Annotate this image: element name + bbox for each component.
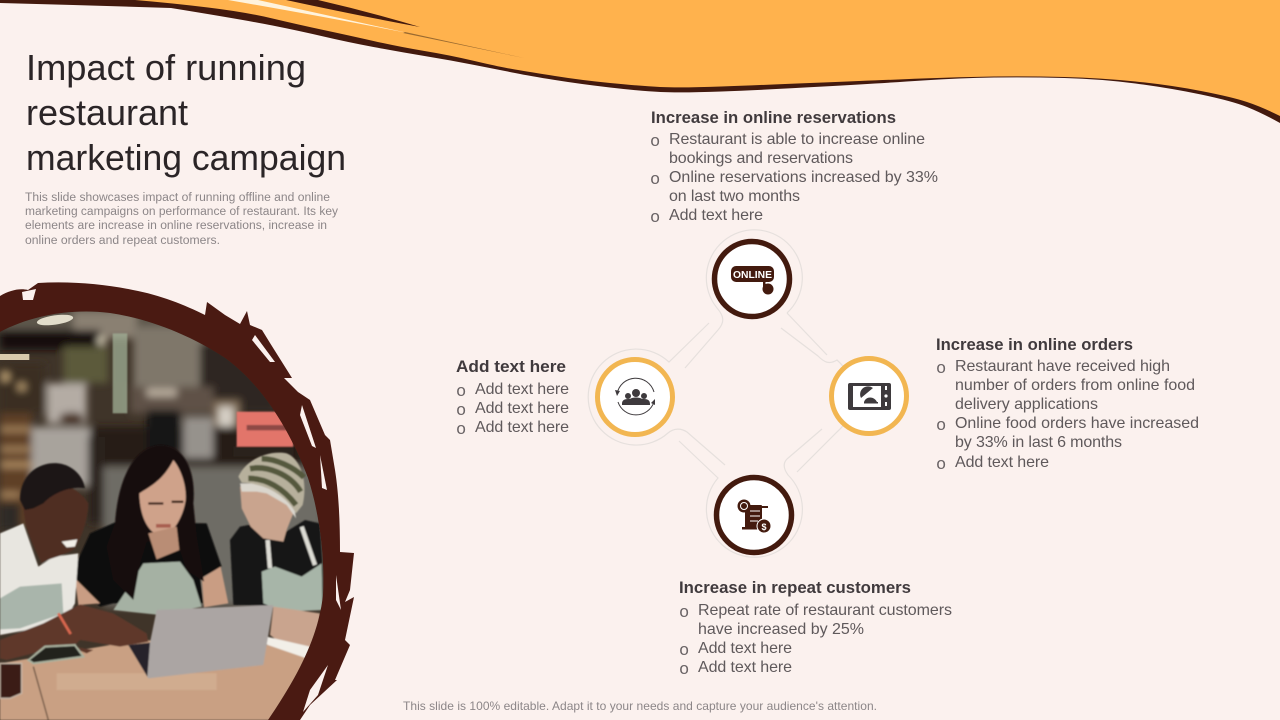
icon: tablet with food xyxy=(848,383,891,410)
text block: online orders: o xyxy=(936,360,946,379)
text block: online orders: Add text here xyxy=(955,454,1049,471)
brush ring flecks xyxy=(22,289,341,712)
photo: restaurant staff around a laptop xyxy=(0,312,324,720)
text block: online reservations: Increase in online reservations xyxy=(651,108,896,127)
text block: online reservations: o xyxy=(650,133,660,152)
node: online orders xyxy=(832,358,906,434)
brush ring xyxy=(0,282,354,720)
text block: repeat customers: o xyxy=(679,604,689,623)
description text: This slide showcases impact of running offline and online xyxy=(25,192,330,204)
node: add text here xyxy=(598,360,672,434)
text block: online orders: o xyxy=(936,417,946,436)
description text: marketing campaigns on performance of restaurant. Its key xyxy=(25,206,338,218)
text block: repeat customers: Increase in repeat customers xyxy=(679,578,911,597)
left woman xyxy=(0,523,78,635)
title: Impact of running xyxy=(26,47,306,88)
description text: elements are increase in online reservations, increase in xyxy=(25,220,327,232)
center woman xyxy=(72,522,222,607)
title xyxy=(26,47,346,178)
right woman xyxy=(230,520,323,607)
description text xyxy=(25,192,338,247)
text block: add text here: o xyxy=(456,383,466,402)
node: online reservations xyxy=(714,242,790,316)
text block: add text here: Add text here xyxy=(475,419,569,436)
text block: repeat customers: Add text here xyxy=(698,640,792,657)
text block: online reservations: bookings and reservations xyxy=(669,150,853,167)
node: repeat customers xyxy=(716,478,792,552)
text block: add text here: o xyxy=(456,402,466,421)
text block: online reservations: Add text here xyxy=(669,207,763,224)
text block: add text here: Add text here xyxy=(475,381,569,398)
text block: add text here xyxy=(456,357,569,440)
text block: online orders: Increase in online orders xyxy=(936,335,1133,354)
text block: repeat customers: Repeat rate of restaurant customers xyxy=(698,602,952,619)
text block: add text here: Add text here xyxy=(456,357,566,376)
footer note: This slide is 100% editable. Adapt it to your needs and capture your audience's attention. xyxy=(403,699,877,713)
text block: online orders: Restaurant have received high xyxy=(955,358,1170,375)
top orange wave banner xyxy=(0,0,1280,123)
text block: add text here: Add text here xyxy=(475,400,569,417)
text block: repeat customers: o xyxy=(679,661,689,680)
title: restaurant xyxy=(26,92,188,133)
text block: online orders: o xyxy=(936,456,946,475)
text block: online reservations: o xyxy=(650,209,660,228)
laptop xyxy=(146,604,274,678)
text block: online orders xyxy=(936,335,1199,475)
text block: add text here: o xyxy=(456,421,466,440)
text block: online reservations: Restaurant is able to increase online xyxy=(669,131,925,148)
text block: online orders: delivery applications xyxy=(955,396,1098,413)
text block: online reservations: on last two months xyxy=(669,188,800,205)
icon: online button: ONLINE xyxy=(733,269,772,281)
text block: repeat customers xyxy=(679,578,952,680)
title: marketing campaign xyxy=(26,137,346,178)
text block: repeat customers: o xyxy=(679,642,689,661)
text block: online orders: number of orders from online food xyxy=(955,377,1195,394)
text block: online reservations: o xyxy=(650,171,660,190)
description text: online orders and repeat customers. xyxy=(25,235,220,247)
table xyxy=(0,640,317,720)
icon: receipt with money bag: $ xyxy=(762,522,767,532)
text block: online orders: Online food orders have increased xyxy=(955,415,1199,432)
text block: online orders: by 33% in last 6 months xyxy=(955,434,1122,451)
connector diagram outline xyxy=(588,230,853,557)
icon: customers with cycle arrows xyxy=(615,378,655,415)
text block: repeat customers: Add text here xyxy=(698,659,792,676)
text block: online reservations xyxy=(650,108,938,228)
text block: online reservations: Online reservations increased by 33% xyxy=(669,169,938,186)
text block: repeat customers: have increased by 25% xyxy=(698,621,864,638)
